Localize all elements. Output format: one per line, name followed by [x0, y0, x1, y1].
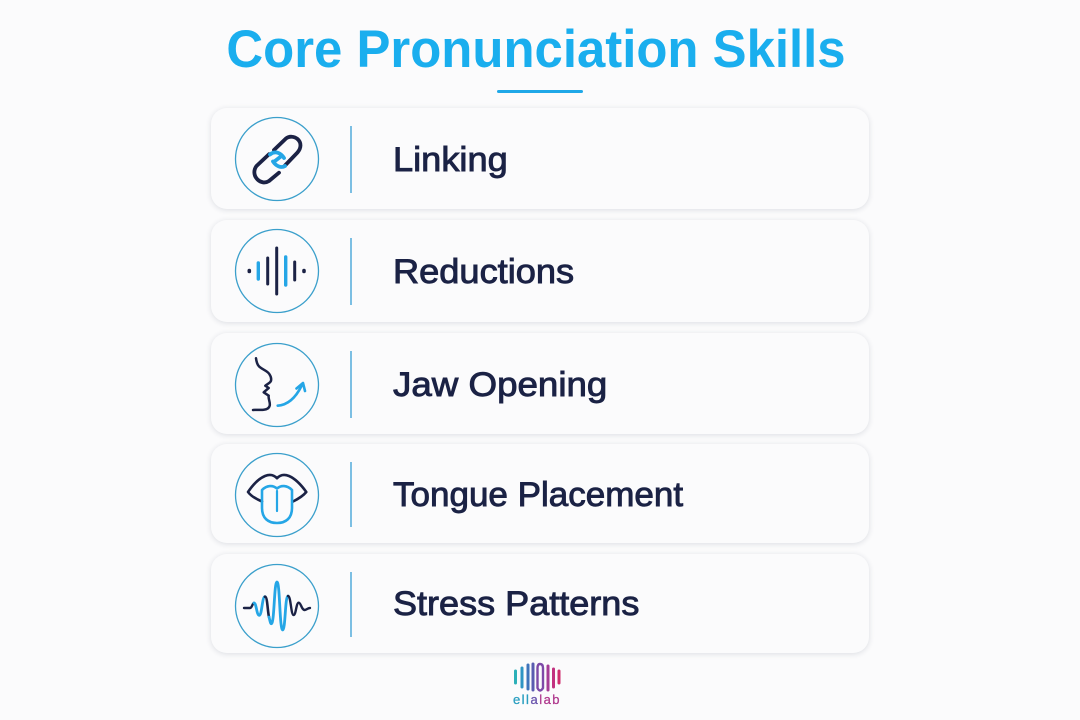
title underline [497, 90, 583, 93]
title: Core Pronunciation Skills [226, 20, 846, 79]
logo: ellalab [513, 662, 561, 707]
divider [350, 238, 352, 305]
divider [350, 351, 352, 418]
logo mark [514, 662, 560, 692]
icon: stress waveform [234, 564, 320, 648]
icon: lips and tongue [234, 452, 320, 538]
panel: Linking [211, 108, 869, 209]
label: Stress Patterns [393, 585, 639, 623]
label: Tongue Placement [393, 476, 683, 514]
panel: Stress Patterns [211, 554, 869, 653]
label: Linking [393, 141, 508, 179]
icon: chain link [234, 116, 320, 202]
divider [350, 572, 352, 637]
logo wordmark: ellalab [513, 692, 561, 707]
panel: Tongue Placement [211, 444, 869, 543]
icon: face profile with arrow [234, 342, 320, 428]
label: Jaw Opening [393, 366, 607, 404]
panel: Reductions [211, 220, 869, 322]
label: Reductions [393, 253, 574, 291]
panel: Jaw Opening [211, 333, 869, 434]
icon: sound wave [234, 228, 320, 314]
divider [350, 126, 352, 193]
divider [350, 462, 352, 527]
